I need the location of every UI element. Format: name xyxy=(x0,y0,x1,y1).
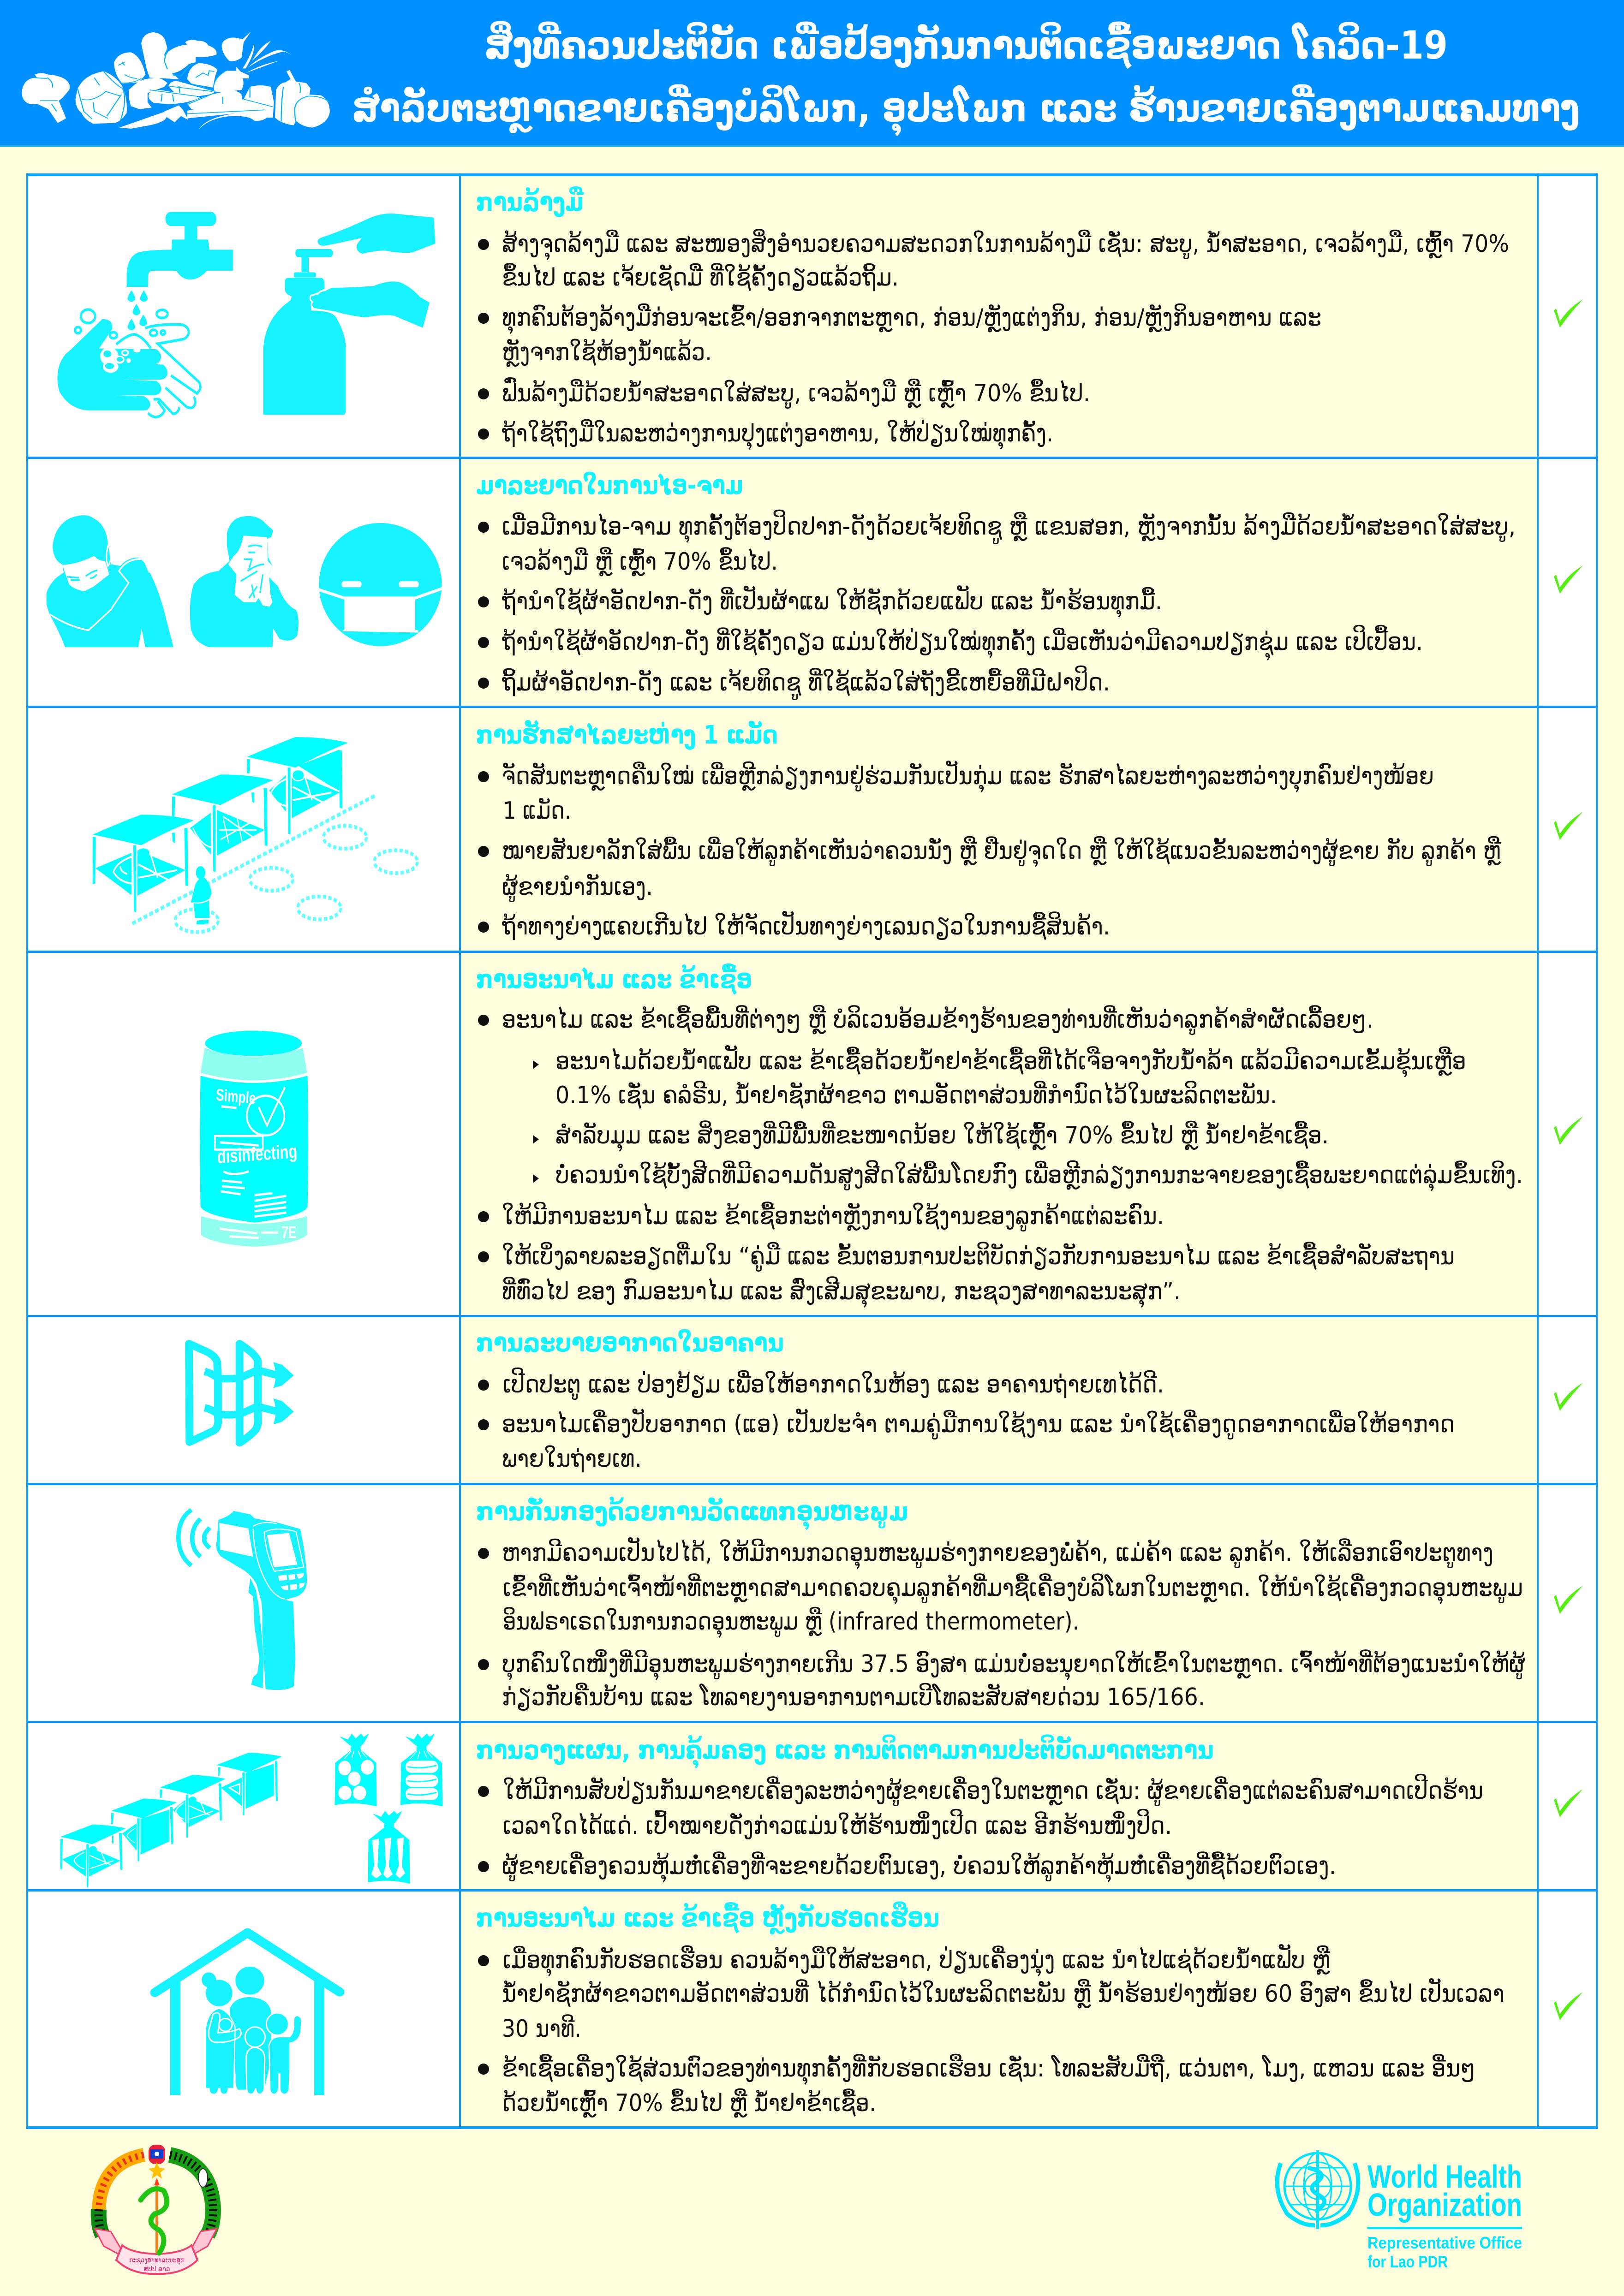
heading: ການອະນາໄມ ແລະ ຂ້າເຊື້ອ xyxy=(476,963,752,995)
bullet list: ໝາຍສັນຍາລັກໃສ່ພື້ນ ເພື່ອໃຫ້ລູກຄ້າເຫັນວ່າຄວນນັ່ງ ຫຼື ຢືນຢູ່ຈຸດໃດ ຫຼື ໃຫ້ໃຊ້ແນວຂັ້ນລະຫວ່າງຜູ້ຂາຍ ກັບ ລູກຄ້າ ຫຼື xyxy=(502,836,1501,868)
bullet list: ບຸກຄົນໃດໜຶ່ງທີ່ມີອຸນຫະພູມຮ່າງກາຍເກີນ 37.5 ອົງສາ ແມ່ນບໍ່ອະນຸຍາດໃຫ້ເຂົ້າໃນຕະຫຼາດ. ເຈົ້າໜ້າທີ່ຕ້ອງແນະນຳໃຫ້ຜູ້ xyxy=(502,1649,1525,1681)
icon: disinfectant canister: 7E xyxy=(281,1223,297,1242)
check mark xyxy=(1554,1383,1583,1411)
bullet list: ເມື່ອທຸກຄົນກັບຮອດເຮືອນ ຄວນລ້າງມືໃຫ້ສະອາດ, ປ່ຽນເຄື່ອງນຸ່ງ ແລະ ນຳໄປແຊ່ດ້ວຍນ້ຳແຟັບ ຫຼື xyxy=(503,1944,1331,1977)
bullet list xyxy=(478,1537,1525,1711)
bullet list: ຫຼັງຈາກໃຊ້ຫ້ອງນ້ຳແລ້ວ. xyxy=(502,339,712,367)
heading: ການວາງແຜນ, ການຄຸ້ມຄອງ ແລະ ການຕິດຕາມການປະຕິບັດມາດຕະການ xyxy=(476,1734,1214,1768)
bullet list xyxy=(478,1005,1523,1308)
bullet list: ຖ້ານຳໃຊ້ຜ້າອັດປາກ-ດັງ ທີ່ໃຊ້ຄັ້ງດຽວ ແມ່ນໃຫ້ປ່ຽນໃໝ່ທຸກຄັ້ງ ເມື່ອເຫັນວ່າມີຄວາມປຽກຊຸ່ມ ແລະ ເປິເປື້ອນ. xyxy=(502,625,1423,661)
bullet list: ພາຍໃນຖ່າຍເທ. xyxy=(502,1445,642,1473)
panel: physical distancing xyxy=(93,720,1583,940)
panel: cleaning and disinfection xyxy=(200,963,1583,1308)
bullet list xyxy=(478,1944,1505,2118)
panel: cough and sneeze etiquette xyxy=(47,470,1583,700)
heading: ການຮັກສາໄລຍະຫ່າງ 1 ແມັດ xyxy=(476,720,778,750)
logo: Lao Ministry of Health emblem xyxy=(95,2145,217,2274)
heading: ການລະບາຍອາກາດໃນອາຄານ xyxy=(476,1328,784,1357)
icon: disinfectant canister: Simple xyxy=(215,1085,257,1108)
panel: planning and management xyxy=(60,1734,1583,1887)
check mark xyxy=(1554,299,1583,327)
organization name: for Lao PDR xyxy=(1367,2252,1448,2271)
bullet list: ຜູ້ຂາຍເຄື່ອງຄວນຫຸ້ມຫໍ່ເຄື່ອງທີ່ຈະຂາຍດ້ວຍຕົນເອງ, ບໍ່ຄວນໃຫ້ລູກຄ້າຫຸ້ມຫໍ່ເຄື່ອງທີ່ຊື້ດ້ວຍຕົວເອງ. xyxy=(502,1851,1336,1883)
icon: rotating stalls and packed bags xyxy=(60,1734,442,1887)
heading: ການກັ່ນກອງດ້ວຍການວັດແທກອຸນຫະພູມ xyxy=(476,1497,908,1530)
bullet list: ກ່ຽວກັບຄືນບ້ານ ແລະ ໂທລາຍງານອາການຕາມເບີໂທລະສັບສາຍດ່ວນ 165/166. xyxy=(502,1683,1205,1711)
bullet list: ເມື່ອມີການໄອ-ຈາມ ທຸກຄັ້ງຕ້ອງປິດປາກ-ດັງດ້ວຍເຈ້ຍທິດຊູ ຫຼື ແຂນສອກ, ຫຼັງຈາກນັ້ນ ລ້າງມືດ້ວຍນ້ຳສະອາດໃສ່ສະບູ, xyxy=(502,510,1516,544)
heading: ການອະນາໄມ ແລະ ຂ້າເຊື້ອ ຫຼັງກັບຮອດເຮືອນ xyxy=(476,1901,939,1934)
bullet list xyxy=(478,760,1501,940)
bullet list: ຂຶ້ນໄປ ແລະ ເຈ້ຍເຊັດມື ທີ່ໃຊ້ຄັ້ງດຽວແລ້ວຖິ້ມ. xyxy=(502,263,899,291)
organization name: Representative Office xyxy=(1367,2233,1522,2252)
check mark xyxy=(1554,1586,1583,1614)
bullet list xyxy=(478,1774,1483,1883)
bullet list: 1 ແມັດ. xyxy=(503,797,571,825)
check mark xyxy=(1554,812,1583,840)
icon: open window with air arrows xyxy=(189,1344,294,1443)
bullet list: ສ້າງຈຸດລ້າງມື ແລະ ສະໜອງສິ່ງອຳນວຍຄວາມສະດວກໃນການລ້າງມື ເຊັ່ນ: ສະບູ, ນ້ຳສະອາດ, ເຈວລ້າງມື, ເຫຼົ້າ 70% xyxy=(502,229,1509,261)
icon: WHO emblem xyxy=(1277,2150,1358,2229)
panel: cleaning after returning home xyxy=(155,1901,1583,2118)
panel: hand washing xyxy=(57,186,1583,450)
bullet list: ເຈວລ້າງມື ຫຼື ເຫຼົ້າ 70% ຂຶ້ນໄປ. xyxy=(502,547,778,576)
bullet list: ຖ້າໃຊ້ຖົງມືໃນລະຫວ່າງການປຸງແຕ່ງອາຫານ, ໃຫ້ປ່ຽນໃໝ່ທຸກຄັ້ງ. xyxy=(502,419,1053,450)
bullet list: ຖ້າທາງຍ່າງແຄບເກີນໄປ ໃຫ້ຈັດເປັນທາງຍ່າງເລນດຽວໃນການຊື້ສິນຄ້າ. xyxy=(502,910,1110,940)
heading: ມາລະຍາດໃນການໄອ-ຈາມ xyxy=(476,470,743,500)
bullet list: ອິນຟຣາເຣດໃນການກວດອຸນຫະພູມ ຫຼື (infrared thermometer). xyxy=(503,1607,1079,1638)
bullet list xyxy=(478,1368,1455,1473)
organization name: Organization xyxy=(1367,2187,1522,2223)
icon: disinfectant canister xyxy=(200,1031,308,1247)
bullet list: ອະນາໄມ ແລະ ຂ້າເຊື້ອພື້ນທີ່ຕ່າງໆ ຫຼື ບໍລິເວນອ້ອມຂ້າງຮ້ານຂອງທ່ານທີ່ເຫັນວ່າລູກຄ້າສຳຜັດເລື້ອຍໆ. xyxy=(502,1005,1373,1035)
bullet list: ໃຫ້ເບິ່ງລາຍລະອຽດຕື່ມໃນ “ຄູ່ມື ແລະ ຂັ້ນຕອນການປະຕິບັດກ່ຽວກັບການອະນາໄມ ແລະ ຂ້າເຊື້ອສຳລັບສະຖານ xyxy=(502,1242,1455,1272)
check mark xyxy=(1554,1992,1583,2020)
bullet list: ຖິ້ມຜ້າອັດປາກ-ດັງ ແລະ ເຈ້ຍທິດຊູ ທີ່ໃຊ້ແລ້ວໃສ່ຖັງຂີ້ເຫຍື້ອທີ່ມີຝາປິດ. xyxy=(502,666,1110,700)
bullet list: ໃຫ້ມີການອະນາໄມ ແລະ ຂ້າເຊື້ອກະຕ່າຫຼັງການໃຊ້ງານຂອງລູກຄ້າແຕ່ລະຄົນ. xyxy=(502,1202,1164,1231)
logo: Lao Ministry of Health emblem: ກະຊວງສາທາລະນະສຸກ xyxy=(129,2256,185,2265)
bullet list: ອະນາໄມດ້ວຍນ້ຳແຟັບ ແລະ ຂ້າເຊື້ອດ້ວຍນ້ຳຢາຂ້າເຊື້ອທີ່ໄດ້ເຈືອຈາງກັບນ້ຳລ້າ ແລ້ວມີຄວາມເຂັ້ມຂຸ້ນເຫຼືອ xyxy=(555,1045,1466,1078)
bullet list: ທີ່ທົ່ວໄປ ຂອງ ກົມອະນາໄມ ແລະ ສົ່ງເສີມສຸຂະພາບ, ກະຊວງສາທາລະນະສຸກ”. xyxy=(502,1277,1181,1308)
bullet list: ສຳລັບມຸມ ແລະ ສິ່ງຂອງທີ່ມີພື້ນທີ່ຂະໜາດນ້ອຍ ໃຫ້ໃຊ້ເຫຼົ້າ 70% ຂຶ້ນໄປ ຫຼື ນ້ຳຢາຂ້າເຊື້ອ. xyxy=(555,1121,1329,1152)
icon: faucet and washing hands xyxy=(57,212,436,417)
bullet list: ເຂົ້າທີ່ເຫັນວ່າເຈົ້າໜ້າທີ່ຕະຫຼາດສາມາດຄວບຄຸມລູກຄ້າທີ່ມາຊື້ເຄື່ອງບໍລິໂພກໃນຕະຫຼາດ. ໃຫ້ນຳໃຊ້ເຄື່ອງກວດອຸນຫະພູມ xyxy=(503,1573,1523,1605)
panel: temperature screening xyxy=(179,1497,1583,1711)
icon: infrared thermometer xyxy=(179,1510,307,1690)
organization name: World Health xyxy=(1367,2159,1522,2195)
organization name xyxy=(1367,2159,1522,2271)
bullet list: ອະນາໄມເຄື່ອງປັບອາກາດ (ແອ) ເປັນປະຈຳ ຕາມຄູ່ມືການໃຊ້ງານ ແລະ ນຳໃຊ້ເຄື່ອງດູດອາກາດເພື່ອໃຫ້ອາກາດ xyxy=(502,1408,1455,1439)
icon: family in a house xyxy=(155,1933,340,2095)
heading: ການລ້າງມື xyxy=(476,186,584,217)
bullet list: ບໍ່ຄວນນຳໃຊ້ບັ້ງສີດທີ່ມີຄວາມດັນສູງສີດໃສ່ພື້ນໂດຍກົງ ເພື່ອຫຼີກລ່ຽງການກະຈາຍຂອງເຊື້ອພະຍາດແຕ່ລຸ່ມຂຶ້ນເທິງ. xyxy=(555,1160,1523,1192)
bullet list: ທຸກຄົນຕ້ອງລ້າງມືກ່ອນຈະເຂົ້າ/ອອກຈາກຕະຫຼາດ, ກ່ອນ/ຫຼັງແຕ່ງກິນ, ກ່ອນ/ຫຼັງກິນອາຫານ ແລະ xyxy=(502,303,1321,334)
bullet list xyxy=(478,229,1509,450)
bullet list: 0.1% ເຊັ່ນ ຄລໍຣີນ, ນ້ຳຢາຊັກຜ້າຂາວ ຕາມອັດຕາສ່ວນທີ່ກຳນົດໄວ້ໃນຜະລິດຕະພັນ. xyxy=(555,1081,1277,1109)
logo: Lao Ministry of Health emblem: ສປປ ລາວ xyxy=(143,2266,170,2273)
bullet list: ຈັດສັນຕະຫຼາດຄືນໃໝ່ ເພື່ອຫຼີກລ່ຽງການຢູ່ຮ່ວມກັນເປັນກຸ່ມ ແລະ ຮັກສາໄລຍະຫ່າງລະຫວ່າງບຸກຄົນຢ່າງໜ້ອຍ xyxy=(502,760,1434,793)
bullet list: ຜູ້ຂາຍນຳກັນເອງ. xyxy=(502,873,653,902)
icon: coughing person, sneezing person, mask xyxy=(47,515,442,647)
bullet list: 30 ນາທີ. xyxy=(502,2014,581,2043)
bullet list: ໃຫ້ມີການສັບປ່ຽນກັນມາຂາຍເຄື່ອງລະຫວ່າງຜູ້ຂາຍເຄື່ອງໃນຕະຫຼາດ ເຊັ່ນ: ຜູ້ຂາຍເຄື່ອງແຕ່ລະຄົນສາມາດເປີດຮ້ານ xyxy=(503,1774,1483,1806)
icon: vegetables xyxy=(22,31,330,129)
bullet list xyxy=(478,510,1516,700)
bullet list: ຂ້າເຊື້ອເຄື່ອງໃຊ້ສ່ວນຕົວຂອງທ່ານທຸກຄັ້ງທີ່ກັບຮອດເຮືອນ ເຊັ່ນ: ໂທລະສັບມືຖື, ແວ່ນຕາ, ໂມງ, ແຫວນ ແລະ ອື່ນໆ xyxy=(502,2054,1475,2085)
icon: market stalls with distancing markers xyxy=(93,737,418,932)
check mark xyxy=(1554,1117,1583,1145)
bullet list: ຟົ່ນລ້າງມືດ້ວຍນ້ຳສະອາດໃສ່ສະບູ, ເຈວລ້າງມື ຫຼື ເຫຼົ້າ 70% ຂຶ້ນໄປ. xyxy=(502,377,1090,409)
bullet list: ຫາກມີຄວາມເປັນໄປໄດ້, ໃຫ້ມີການກວດອຸນຫະພູມຮ່າງກາຍຂອງພໍ່ຄ້າ, ແມ່ຄ້າ ແລະ ລູກຄ້າ. ໃຫ້ເລືອກເອົາປະຕູທາງ xyxy=(502,1537,1493,1570)
title line 1: ສິ່ງທີ່ຄວນປະຕິບັດ ເພື່ອປ້ອງກັນການຕິດເຊື້ອພະຍາດ ໂຄວິດ-19 xyxy=(484,21,1448,69)
icon: disinfectant canister: disinfecting xyxy=(217,1140,298,1167)
check mark xyxy=(1554,1789,1583,1817)
bullet list: ເປີດປະຕູ ແລະ ປ່ອງຢ້ຽມ ເພື່ອໃຫ້ອາກາດໃນຫ້ອງ ແລະ ອາຄານຖ່າຍເທໄດ້ດີ. xyxy=(503,1368,1164,1400)
bullet list: ນ້ຳຢາຊັກຜ້າຂາວຕາມອັດຕາສ່ວນທີ່ ໄດ້ກຳນົດໄວ້ໃນຜະລິດຕະພັນ ຫຼື ນ້ຳຮ້ອນຢ່າງໜ້ອຍ 60 ອົງສາ ຂຶ້ນໄປ ເປັນເວລາ xyxy=(502,1978,1505,2008)
panel: ventilation xyxy=(189,1328,1583,1473)
logo: World Health Organization xyxy=(1277,2150,1522,2271)
header banner xyxy=(0,0,1624,147)
check mark xyxy=(1554,565,1583,594)
bullet list: ເວລາໃດໄດ້ແດ່. ເປົ້າໝາຍດັ່ງກ່າວແມ່ນໃຫ້ຮ້ານໜຶ່ງເປີດ ແລະ ອີກຮ້ານໜຶ່ງປິດ. xyxy=(503,1809,1172,1840)
bullet list: ຖ້ານຳໃຊ້ຜ້າອັດປາກ-ດັງ ທີ່ເປັນຜ້າແພ ໃຫ້ຊັກດ້ວຍແຟັບ ແລະ ນ້ຳຮ້ອນທຸກມື້. xyxy=(502,585,1162,618)
bullet list: ດ້ວຍນ້ຳເຫຼົ້າ 70% ຂຶ້ນໄປ ຫຼື ນ້ຳຢາຂ້າເຊື້ອ. xyxy=(502,2088,876,2118)
